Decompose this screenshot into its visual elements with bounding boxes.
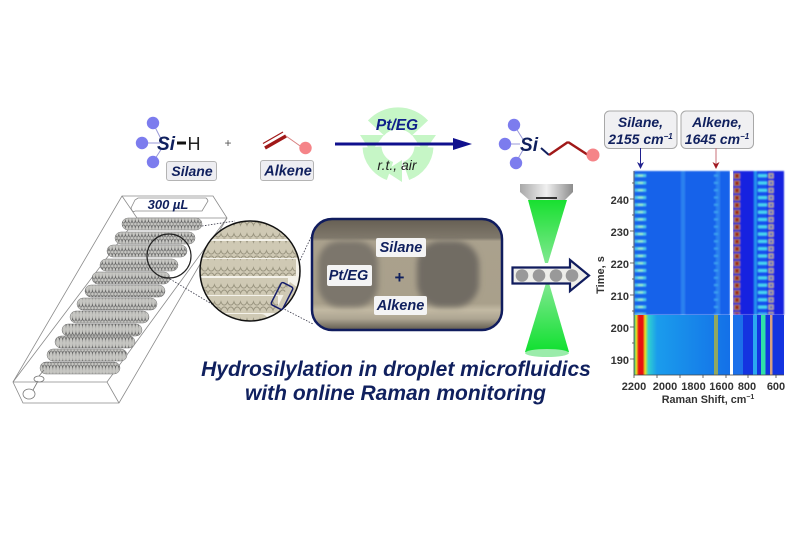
x axis: −1 <box>746 394 754 401</box>
x axis: Raman Shift, cm <box>662 394 746 406</box>
title: with online Raman monitoring <box>245 382 546 405</box>
silane molecule: Si <box>157 134 176 155</box>
x axis: 1800 <box>681 381 706 393</box>
coil channels <box>40 218 202 374</box>
y axis: Time, s <box>595 256 607 294</box>
droplets <box>318 241 479 307</box>
product molecule: Si <box>520 135 539 156</box>
green laser beam <box>528 200 567 263</box>
arrow: alkene peak <box>712 148 720 169</box>
zoom connector lines <box>170 221 313 324</box>
reaction scheme <box>136 117 600 182</box>
y axis: 230 <box>611 227 629 239</box>
lower heatmap <box>634 315 784 375</box>
y axis: 210 <box>611 291 629 303</box>
microreactor chip <box>13 196 227 403</box>
laser optics <box>520 184 573 357</box>
alkene label: Alkene <box>263 164 312 180</box>
silane label: Silane <box>171 163 213 179</box>
chip outline <box>13 196 227 403</box>
x axis <box>622 381 785 406</box>
callout: alkene peak: Alkene, <box>691 114 742 130</box>
x axis: 600 <box>767 381 785 393</box>
silane label <box>166 162 216 180</box>
x axis: 800 <box>738 381 756 393</box>
icon: recycling symbol <box>360 118 436 182</box>
alkene tag: Alkene <box>376 298 424 314</box>
x axis: 2000 <box>653 381 677 393</box>
Raman heatmap <box>595 171 785 406</box>
arrow: silane peak <box>637 148 644 169</box>
arrow: reaction <box>335 138 472 150</box>
title <box>201 358 591 405</box>
inlet ports <box>23 370 44 399</box>
callout: silane peak: Silane, <box>618 114 663 130</box>
axis break <box>730 171 733 375</box>
silane molecule <box>136 117 200 168</box>
large magnified circle <box>198 221 300 328</box>
upper heatmap <box>634 171 784 315</box>
volume label <box>131 197 208 212</box>
y axis: 240 <box>611 195 629 207</box>
y axis <box>595 171 784 378</box>
small magnifier circle <box>147 234 191 278</box>
x axis: 2200 <box>622 381 646 393</box>
callout: silane peak: −1 <box>664 132 673 141</box>
plus sign: + <box>395 268 405 287</box>
callout: alkene peak: 1645 cm <box>685 131 740 147</box>
catalyst label: Pt/EG <box>376 117 418 134</box>
y axis: 190 <box>611 355 629 367</box>
Pt/EG tag <box>327 265 372 286</box>
alkene molecule <box>263 132 312 154</box>
Pt/EG tag: Pt/EG <box>329 268 368 284</box>
silane molecule: H <box>188 134 200 154</box>
title: Hydrosilylation in droplet microfluidics <box>201 358 591 381</box>
y axis: 220 <box>611 259 629 271</box>
conditions: r.t., air <box>377 157 418 173</box>
product molecule <box>499 119 600 169</box>
callout: alkene peak: −1 <box>740 132 750 141</box>
selection rectangle <box>271 282 293 310</box>
silane tag: Silane <box>380 240 422 256</box>
y axis: 200 <box>611 323 629 335</box>
droplet photo panel <box>312 219 502 330</box>
flow arrow <box>512 260 589 291</box>
callout: alkene peak <box>681 111 754 148</box>
callout: silane peak <box>604 111 677 148</box>
x axis: 1600 <box>709 381 734 393</box>
volume label: 300 µL <box>148 197 188 212</box>
objective lens <box>520 184 573 205</box>
plus sign: + <box>224 136 232 150</box>
callout: silane peak: 2155 cm <box>608 131 664 147</box>
